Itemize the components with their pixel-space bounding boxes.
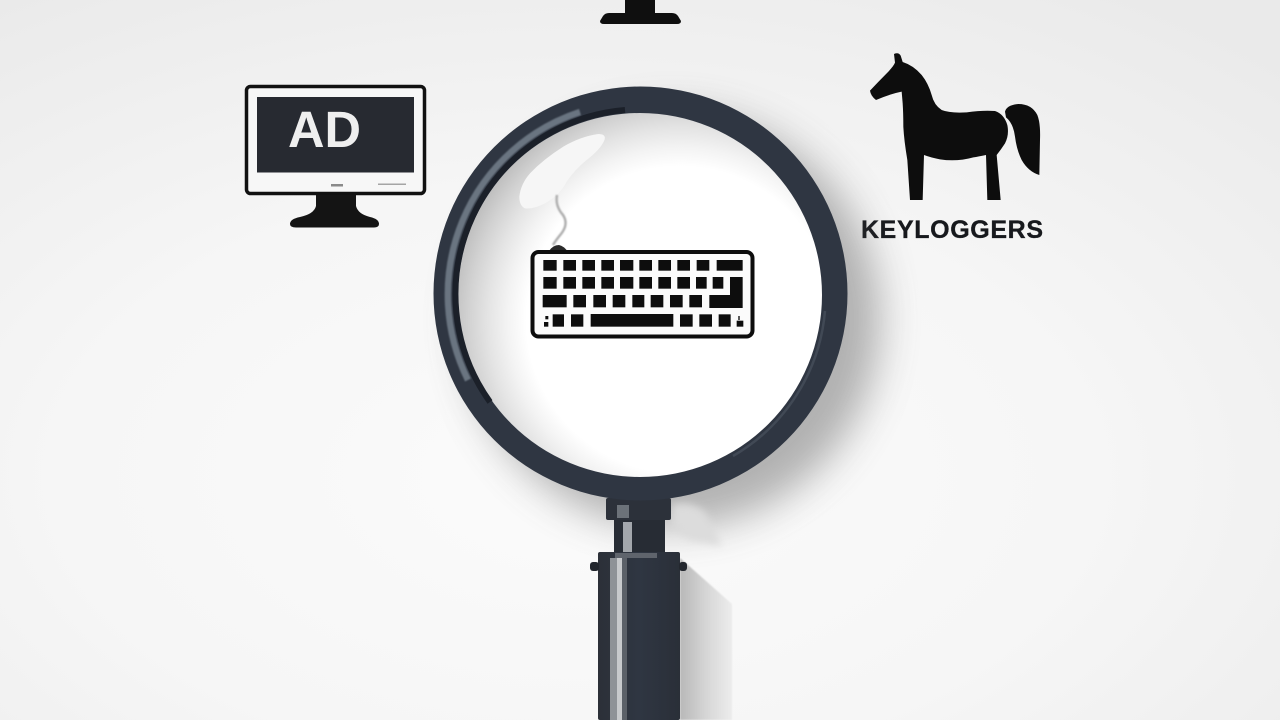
magnifying glass: [434, 86, 848, 720]
keyboard row 2: [543, 277, 743, 308]
keyboard row 4: [544, 314, 743, 327]
icon: cropped monitor stand at top: [600, 0, 681, 24]
magnifier handle: [590, 498, 687, 720]
magnifier lens: [456, 111, 824, 479]
shadow: magnifier handle: [672, 504, 732, 720]
monitor label: AD: AD: [288, 101, 361, 158]
label: keyloggers: KEYLOGGERS: [861, 216, 1043, 244]
keyboard row 3: [543, 295, 702, 307]
lens glare: [519, 134, 605, 245]
icon: keyboard: [532, 245, 752, 336]
magnifier ring: [434, 86, 848, 500]
keyboard row 1: [543, 260, 743, 271]
icon: trojan horse: [870, 53, 1040, 200]
shadow: magnifier ring: [464, 112, 880, 528]
icon: monitor showing AD: [246, 86, 424, 228]
